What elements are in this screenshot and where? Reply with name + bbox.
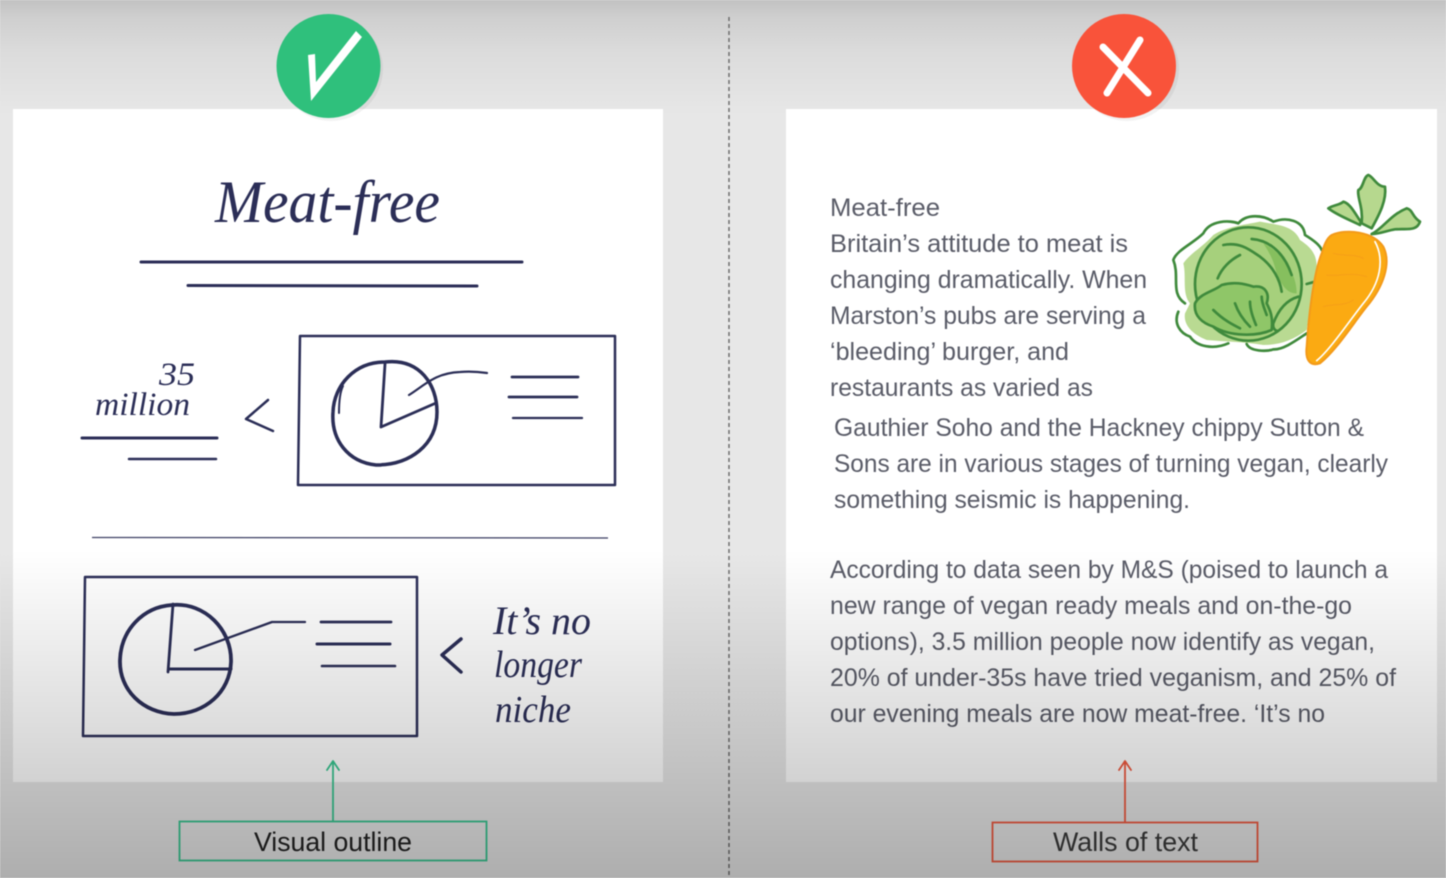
text block: statistics paragraph: new range of vegan ready meals and on-the-go: [830, 592, 1352, 620]
text block: statistics paragraph: According to data seen by M&S (poised to launch a: [830, 556, 1388, 584]
sketch: first chart frame with pie: [298, 336, 615, 485]
text block: intro beside illustration: Meat-free: [830, 194, 940, 222]
sketch: second chart frame with pie: [83, 577, 417, 736]
text block: statistics paragraph: options), 3.5 million people now identify as vegan,: [830, 628, 1375, 656]
arrow: first less-than pointer: [246, 400, 273, 431]
arrow: second less-than pointer: [442, 639, 461, 672]
title underlines: [141, 262, 522, 286]
text block: continuation paragraph: Sons are in various stages of turning vegan, clearly: [834, 450, 1388, 478]
callout: Visual outline: Visual outline: [254, 827, 412, 857]
handwritten note: 35 million: [95, 357, 195, 423]
text block: intro beside illustration: restaurants as varied as: [830, 374, 1093, 402]
handwritten note: It's no longer niche: longer: [494, 644, 582, 686]
note underlines: [82, 438, 217, 459]
icon: lettuce: [1173, 216, 1322, 351]
text block: continuation paragraph: something seismic is happening.: [834, 486, 1190, 514]
handwritten note: 35 million: million: [95, 387, 190, 423]
heading: handwritten Meat-free: Meat-free: [214, 169, 440, 235]
handwritten note: 35 million: 35: [158, 357, 195, 393]
text block: statistics paragraph: our evening meals are now meat-free. ‘It’s no: [830, 700, 1325, 728]
icon: green check badge: [276, 14, 383, 121]
icon: red cross badge: [1072, 14, 1179, 121]
text block: statistics paragraph: [830, 556, 1396, 728]
arrow: green pointer up to outline: [327, 761, 339, 821]
handwritten note: It's no longer niche: It’s no: [492, 598, 591, 643]
arrow: red pointer up to text: [1119, 761, 1131, 822]
icon: lettuce and carrot illustration: [1173, 175, 1420, 364]
text block: intro beside illustration: Britain’s attitude to meat is: [830, 230, 1128, 258]
text block: continuation paragraph: Gauthier Soho and the Hackney chippy Sutton &: [834, 414, 1364, 442]
callout: Visual outline: [180, 822, 486, 860]
handwritten note: It's no longer niche: [492, 598, 591, 731]
text block: intro beside illustration: changing dramatically. When: [830, 266, 1147, 294]
text block: intro beside illustration: [830, 194, 1147, 402]
text block: intro beside illustration: ‘bleeding’ burger, and: [830, 338, 1069, 366]
callout: Walls of text: Walls of text: [1053, 827, 1198, 857]
text block: statistics paragraph: 20% of under-35s have tried veganism, and 25% of: [830, 664, 1396, 692]
text block: intro beside illustration: Marston’s pubs are serving a: [830, 302, 1146, 330]
text block: continuation paragraph: [834, 414, 1388, 514]
panel: walls of text slide: [786, 109, 1437, 782]
icon: carrot: [1306, 175, 1420, 364]
handwritten note: It's no longer niche: niche: [495, 689, 571, 731]
panel: visual outline slide: [13, 109, 663, 782]
callout: Walls of text: [992, 822, 1258, 862]
